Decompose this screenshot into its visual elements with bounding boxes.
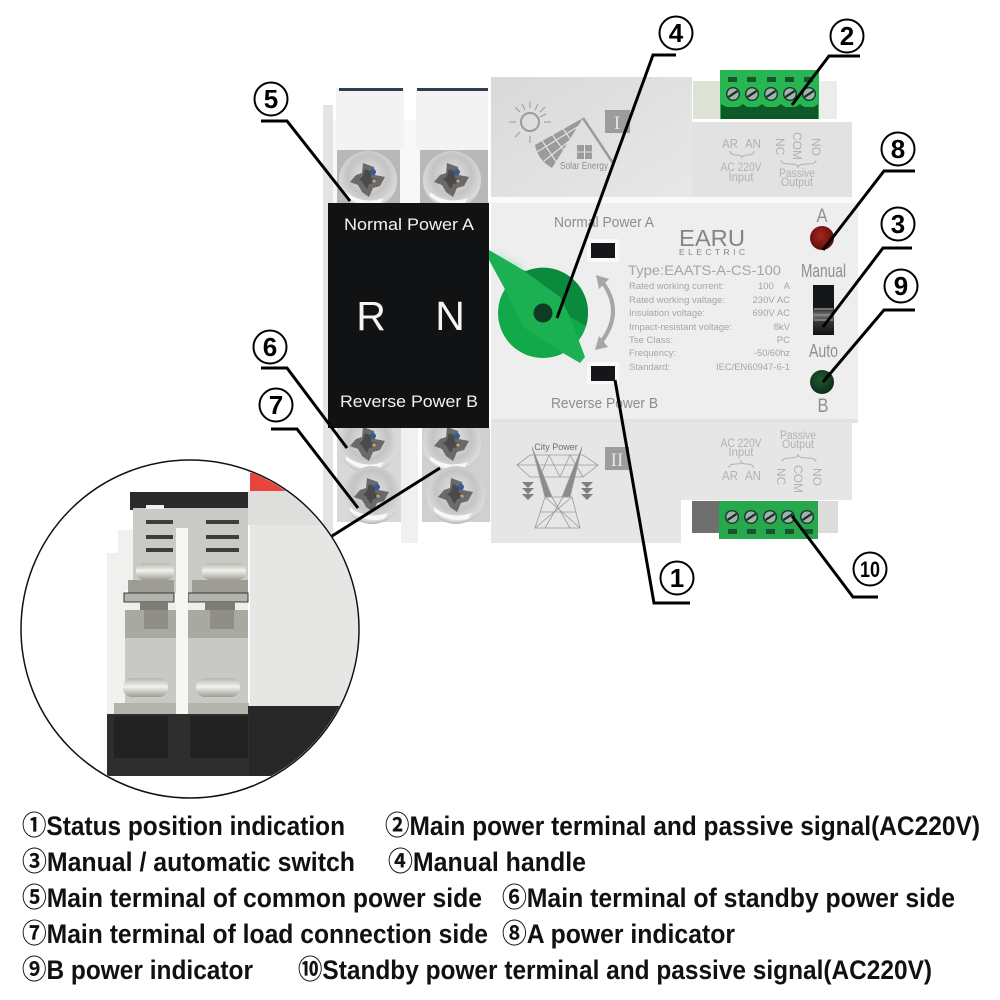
specification text: Rated working valtage:: [629, 295, 725, 306]
bottom block terminal labels: AN: [745, 468, 761, 483]
legend item 1: ①Status position indication: [22, 811, 345, 841]
callout number 5: [254, 82, 288, 116]
bottom block terminal labels: Output: [782, 439, 815, 451]
specification text: Type:EAATS-A-CS-100: [628, 262, 781, 278]
top block terminal labels: AC 220V: [720, 162, 762, 174]
indicator A and switch: A: [816, 206, 828, 227]
terminal block: left side: [323, 88, 490, 543]
callout number 10: [854, 552, 886, 586]
legend item 8: ⑧A power indicator: [502, 919, 735, 949]
leader line: 3: [823, 248, 912, 327]
callout number 1: 1: [670, 563, 684, 593]
callout number 4: 4: [669, 18, 684, 48]
leader line: 9: [823, 310, 915, 382]
roman numeral I: [605, 110, 630, 134]
callout number 10: 10: [860, 557, 880, 582]
specification text: IEC/EN60947-6-1: [716, 362, 790, 373]
normal power text: Normal Power A: [554, 215, 654, 231]
leader line: 1: [615, 380, 690, 603]
callout number 4: [660, 16, 692, 50]
legend: [22, 811, 980, 985]
specification text: A: [784, 281, 791, 292]
legend item 3: ③Manual / automatic switch: [22, 847, 355, 877]
top terminal connector: [693, 70, 837, 119]
specification text: Impact-resistant voltage:: [629, 322, 732, 333]
top block terminal labels: Output: [781, 177, 814, 189]
leader line: 5: [261, 121, 350, 201]
bottom block terminal labels: Passive: [780, 430, 816, 442]
roman numeral II: [605, 447, 629, 471]
bottom block terminal labels: NC: [774, 468, 788, 486]
icon: rotate arrows: [595, 275, 613, 350]
legend item 9: ⑨B power indicator: [22, 955, 253, 985]
callout number 9: 9: [894, 271, 908, 301]
specification text: 230V AC: [752, 295, 790, 306]
reverse power text: Reverse Power B: [551, 396, 658, 412]
black label panel: [328, 203, 489, 428]
callout number 7: 7: [269, 390, 283, 420]
specification text: Insulation voltage:: [629, 308, 705, 319]
status windows: [587, 239, 619, 384]
top block terminal labels: COM: [790, 132, 804, 160]
leader line: 6: [261, 368, 347, 448]
legend item 7: ⑦Main terminal of load connection side: [22, 919, 488, 949]
callout number 3: 3: [891, 209, 905, 239]
callout number 5: 5: [264, 84, 278, 114]
bottom block terminal labels: Input: [728, 447, 754, 459]
black label panel: Normal Power A: [344, 215, 475, 234]
brand logo: ELECTRIC: [679, 247, 745, 257]
icon: solar energy house: [509, 101, 613, 172]
legend item 5: ⑤Main terminal of common power side: [22, 883, 482, 913]
leader line: 2: [792, 56, 860, 105]
leader line: 8: [823, 171, 915, 250]
specification text: -50/60hz: [754, 348, 790, 359]
specification text: PC: [777, 335, 790, 346]
indicator A and switch: [801, 206, 846, 417]
callout number 8: 8: [891, 134, 905, 164]
legend item 6: ⑥Main terminal of standby power side: [502, 883, 955, 913]
legend item 4: ④Manual handle: [388, 847, 586, 877]
callout number 2: 2: [840, 21, 854, 51]
top block terminal labels: AN: [745, 136, 761, 151]
specification text: Standard:: [629, 362, 670, 373]
specification text: [628, 262, 791, 373]
bottom block terminal labels: COM: [791, 465, 805, 493]
callout number 6: 6: [263, 332, 277, 362]
bottom block terminal labels: AR: [722, 468, 738, 483]
icon: solar energy house: Solar Energy: [560, 161, 608, 172]
leader line: 7: [271, 429, 358, 508]
callout number 1: [660, 562, 694, 594]
specification text: Frequency:: [629, 348, 676, 359]
indicator A and switch: Auto: [809, 341, 838, 361]
specification text: Tse Class:: [629, 335, 673, 346]
black label panel: R: [356, 293, 386, 339]
top block terminal labels: AR: [722, 136, 738, 151]
leader line: 10: [792, 516, 878, 597]
bottom block terminal labels: AC 220V: [720, 438, 762, 450]
brand logo: EARU: [679, 225, 745, 251]
roman numeral II: II: [611, 450, 623, 471]
specification text: 690V AC: [752, 308, 790, 319]
top block terminal labels: Input: [728, 172, 754, 184]
indicator A and switch: B: [818, 396, 828, 417]
callout number 7: [260, 388, 292, 422]
bottom block terminal labels: NO: [810, 468, 824, 486]
specification text: 8kV: [774, 322, 791, 333]
top block terminal labels: Passive: [779, 168, 815, 180]
callout number 6: [254, 330, 286, 364]
top block terminal labels: NC: [773, 138, 787, 156]
leader line: 4: [557, 55, 676, 318]
icon: city power tower: [517, 442, 598, 528]
indicator A and switch: Manual: [801, 261, 846, 281]
callout number 3: [882, 208, 914, 240]
top block terminal labels: [720, 132, 823, 189]
callout number 9: [884, 270, 918, 302]
bottom block terminal labels: [720, 430, 824, 493]
leader line: detail circle: [332, 468, 440, 536]
roman numeral I: I: [614, 113, 620, 134]
icon: city power tower: City Power: [534, 442, 578, 452]
callout number 2: [830, 20, 864, 52]
specification text: Rated working current:: [629, 281, 724, 292]
bottom terminal connector: [692, 501, 838, 539]
top block terminal labels: NO: [809, 138, 823, 156]
icon: manual handle: [489, 250, 588, 363]
switch body: [491, 77, 858, 543]
specification text: 100: [758, 281, 774, 292]
legend item 10: ⑩Standby power terminal and passive signal(AC220V): [298, 955, 932, 985]
black label panel: Reverse Power B: [340, 392, 478, 411]
magnified detail circle: [21, 460, 368, 798]
callout number 8: [882, 132, 914, 166]
black label panel: N: [435, 293, 465, 339]
